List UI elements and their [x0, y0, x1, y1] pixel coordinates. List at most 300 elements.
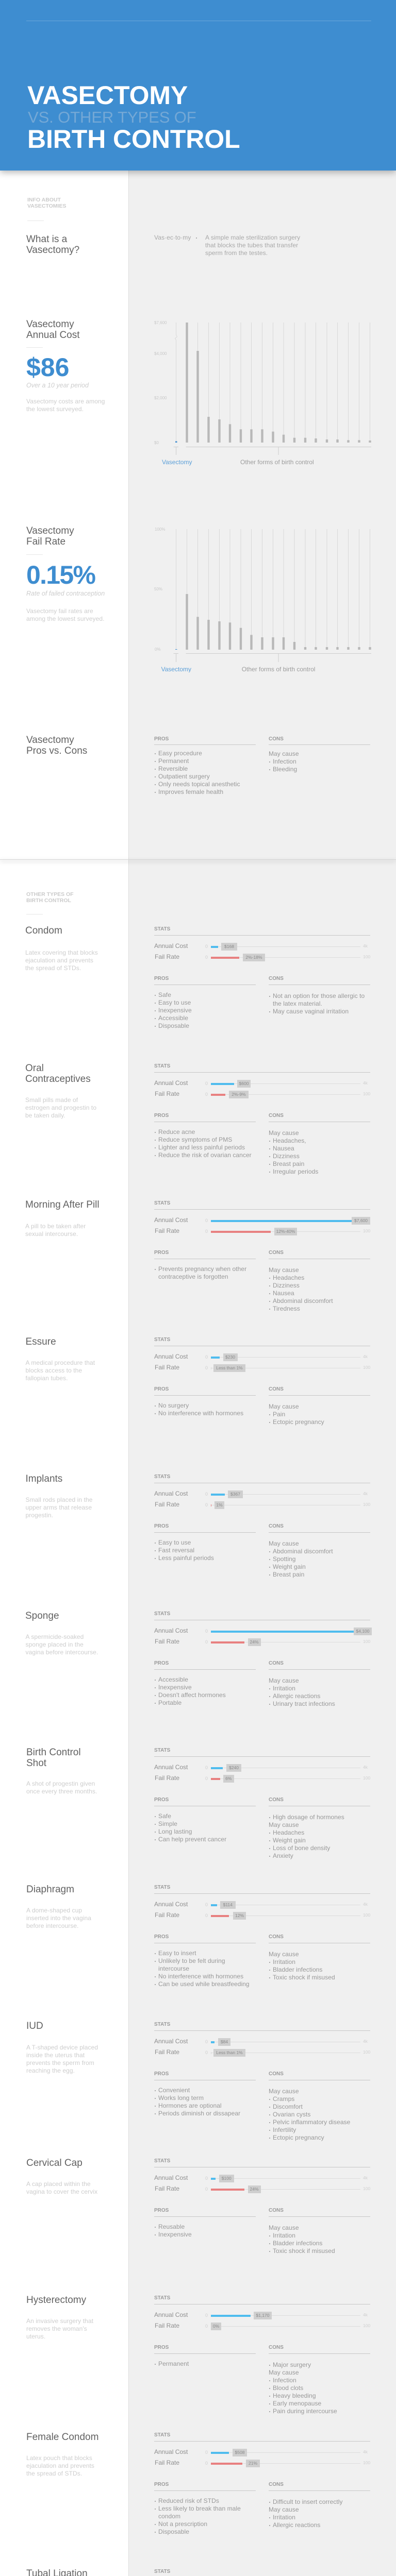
stat row: fail rate: 1% [216, 1502, 223, 1507]
cons: May cause [269, 2088, 299, 2095]
stat row: annual cost: Annual Cost [154, 2038, 188, 2045]
subtitle: vs. other types of: VS. OTHER TYPES OF [28, 108, 196, 126]
stat row: annual cost: 0 [205, 1629, 208, 1634]
stat row: fail rate [154, 1364, 372, 1372]
definition text: that blocks the tubes that transfer [205, 242, 298, 249]
stat row: fail rate: 2%-9% [232, 1092, 246, 1097]
stat row: fail rate: 0 [205, 2050, 208, 2055]
stat row: fail rate: 100 [363, 1502, 370, 1507]
stat row: fail rate: Fail Rate [155, 1364, 179, 1371]
cons: Allergic reactions [273, 1692, 320, 1700]
panel: vasectomy pros [154, 736, 256, 795]
stat row: annual cost: 0 [205, 2313, 208, 2318]
description: ejaculation and prevents [26, 2462, 94, 2469]
stats [154, 1063, 370, 1098]
cons: Tiredness [273, 1305, 300, 1312]
text: cost summary: Vasectomy costs are among [26, 398, 105, 405]
stat row: annual cost [154, 2449, 372, 2456]
cons: May cause [269, 1821, 299, 1828]
cons: Bladder infections [273, 2240, 322, 2247]
stat row: annual cost: 4k [363, 1902, 368, 1907]
cons: CONS [269, 1660, 284, 1666]
panel: vasectomy pros: Easy procedure [158, 750, 202, 757]
section divider shadow [0, 859, 396, 860]
cons: Heavy bleeding [273, 2392, 316, 2399]
description [26, 1907, 91, 1930]
cons: Dizziness [273, 1282, 300, 1289]
stat row: fail rate: 0 [205, 1092, 208, 1097]
stat row: annual cost: Annual Cost [154, 1490, 188, 1497]
cons: May cause vaginal irritation [273, 1008, 349, 1015]
pros: Permanent [158, 2360, 189, 2367]
heading: what is a vasectomy: What is a [26, 234, 67, 245]
pros: Inexpensive [158, 1684, 192, 1691]
description: inserted into the vagina [26, 1914, 91, 1922]
y axis labels: 0% [155, 647, 161, 652]
description: inside the uterus that [26, 2052, 85, 2059]
stat row: fail rate: 100 [363, 1912, 370, 1918]
cons [269, 1934, 370, 2006]
description: removes the woman's [26, 2325, 87, 2332]
cons: Abdominal discomfort [273, 1297, 333, 1304]
stat row: annual cost [154, 1901, 372, 1909]
description: A T-shaped device placed [26, 2044, 98, 2051]
heading: condom: Condom [25, 925, 62, 936]
panel: oral contraceptives [25, 1063, 370, 1175]
big stat: 0.15%: 0.15% [26, 561, 95, 589]
description: progestin. [26, 1512, 53, 1519]
stat row: annual cost [154, 1079, 368, 1088]
cons: Urinary tract infections [273, 1700, 335, 1707]
pros [154, 1797, 256, 1869]
stat row: annual cost [154, 2312, 372, 2319]
pros: PROS [154, 976, 169, 981]
stats [154, 2021, 372, 2058]
panel: vasectomy pros: Only needs topical anesthetic [158, 781, 240, 788]
definition text [205, 234, 300, 257]
pros: condom [158, 2513, 180, 2520]
stat row: annual cost: 0 [205, 2039, 208, 2044]
heading: Essure [26, 1336, 56, 1347]
stat row: fail rate: 0 [205, 2461, 208, 2466]
description: blocks access to the [26, 1367, 82, 1374]
cons [269, 1386, 370, 1458]
cons: Headaches [273, 1829, 304, 1836]
cons: Spotting [273, 1555, 296, 1563]
description [26, 2454, 94, 2478]
cons: Difficult to insert correctly [273, 2498, 343, 2505]
heading: vasectomy annual cost: Vasectomy [26, 319, 74, 330]
pros [154, 2071, 256, 2143]
description [26, 2180, 97, 2196]
stat row: fail rate: Less than 1% [216, 1365, 243, 1370]
cons: Not an option for those allergic to [273, 992, 365, 999]
stat row: annual cost [154, 1628, 372, 1635]
cons: Pelvic inflammatory disease [273, 2119, 350, 2126]
stat row: fail rate: 0 [205, 2324, 208, 2329]
cons [269, 1797, 370, 1869]
cons: Headaches, [273, 1137, 306, 1144]
stat row: fail rate: 0 [205, 1639, 208, 1645]
description: once every three months. [26, 1788, 97, 1795]
panel: hysterectomy [0, 2289, 396, 2420]
description: Small pills made of [25, 1096, 78, 1104]
heading: vasectomy annual cost: Annual Cost [26, 330, 80, 341]
pros: Reduced risk of STDs [158, 2497, 219, 2504]
panel: vasectomy cons: Bleeding [273, 766, 297, 773]
text: fail rate summary: among the lowest surveyed. [26, 615, 104, 622]
heading [26, 1747, 81, 1769]
panel: cervical cap [0, 2151, 396, 2283]
pros: Easy to use [158, 999, 191, 1006]
big stat: $86: $86 [26, 353, 69, 382]
stat row: annual cost: $508 [235, 2450, 244, 2455]
stat row: fail rate [155, 953, 370, 961]
stat row: annual cost: 0 [205, 1902, 208, 1907]
stat row: fail rate: 100 [363, 954, 370, 959]
stat row: fail rate: 100 [363, 1091, 370, 1096]
pros [154, 1660, 256, 1732]
cons: Toxic shock if misused [273, 1974, 335, 1981]
section eyebrow: other types of birth control [26, 891, 74, 904]
pros: Disposable [158, 2528, 189, 2535]
cons: Weight gain [273, 1837, 306, 1844]
pros: Disposable [158, 1022, 189, 1029]
stat row: fail rate: 6% [225, 1776, 232, 1781]
pros [154, 1386, 256, 1458]
cons: Nausea [273, 1145, 294, 1152]
pros: Fast reversal [158, 1547, 194, 1554]
stat row: annual cost [154, 2038, 372, 2046]
stat row: fail rate: 24% [250, 1639, 259, 1645]
pros: No interference with hormones [158, 1410, 243, 1417]
pros: Works long term [158, 2094, 204, 2102]
description [25, 1096, 96, 1119]
stat row: fail rate: 24% [250, 2187, 259, 2192]
description: A shot of progestin given [26, 1780, 95, 1787]
stat row: annual cost: Annual Cost [154, 2448, 188, 2455]
stat row: annual cost: 0 [205, 944, 208, 949]
heading: Shot [26, 1758, 46, 1769]
text: cost summary: the lowest surveyed. [26, 405, 84, 413]
cons: Irritation [273, 2514, 295, 2521]
section eyebrow: info about vasectomies: INFO ABOUT [27, 197, 61, 203]
cons: Nausea [273, 1290, 294, 1297]
cons: Blood clots [273, 2384, 303, 2392]
stat row: fail rate [154, 2185, 372, 2193]
cons: May cause [269, 1129, 299, 1137]
stats: STATS [154, 2022, 170, 2027]
stats [154, 1200, 370, 1235]
cons: Bladder infections [273, 1966, 322, 1973]
stat row: fail rate: Fail Rate [155, 953, 179, 960]
cons: Irritation [273, 1685, 295, 1692]
heading: Implants [26, 1473, 62, 1484]
cons [269, 2207, 370, 2279]
cons: May cause [269, 2506, 299, 2513]
pros [154, 1934, 256, 2006]
cons: May cause [269, 2224, 299, 2231]
description: A dome-shaped cup [26, 1907, 82, 1914]
text: fail rate summary: Vasectomy fail rates are [26, 607, 93, 615]
cons: Early menopause [273, 2400, 321, 2407]
description: the spread of STDs. [25, 964, 81, 972]
cons: Irregular periods [273, 1168, 318, 1175]
cons: May cause [269, 1403, 299, 1410]
description: sexual intercourse. [25, 1230, 78, 1238]
background: column divider [128, 171, 129, 2576]
description: estrogen and progestin to [25, 1104, 96, 1111]
stat row: fail rate: Fail Rate [155, 2185, 179, 2192]
bar chart: fail rate comparison [154, 527, 371, 672]
cons: Anxiety [273, 1852, 293, 1859]
description: Latex covering that blocks [25, 949, 98, 956]
pros [154, 2344, 256, 2416]
pros: Prevents pregnancy when other [158, 1265, 246, 1273]
cons [269, 1250, 370, 1312]
pros [154, 2481, 256, 2553]
stat row: annual cost: 4k [363, 2312, 368, 2317]
cons [269, 2071, 370, 2143]
stat row: annual cost: 4k [363, 2175, 368, 2180]
panel: essure [26, 1336, 370, 1426]
stats [154, 1747, 372, 1784]
panel: condom [25, 925, 370, 1029]
title: vasectomy: VASECTOMY [27, 81, 188, 110]
cons: CONS [269, 1113, 284, 1118]
stats: STATS [154, 1748, 170, 1753]
cons: Ectopic pregnancy [273, 1418, 324, 1426]
bars: other forms of birth control [186, 323, 371, 443]
pros: Can be used while breastfeeding [158, 1980, 250, 1988]
stat row: fail rate: 2%-18% [245, 955, 262, 960]
pros: Inexpensive [158, 2231, 192, 2238]
description [25, 1223, 86, 1238]
pros: Less painful periods [158, 1554, 214, 1562]
stat row: annual cost [154, 2175, 372, 2182]
stat row: fail rate: Fail Rate [155, 2048, 179, 2056]
stat row: fail rate: 100 [363, 2049, 370, 2055]
cons [269, 1523, 370, 1595]
stat row: annual cost [154, 1764, 372, 1772]
stat row: annual cost: 0 [205, 1218, 208, 1223]
stats [154, 2295, 372, 2332]
heading: Contraceptives [25, 1074, 91, 1084]
pros: Accessible [158, 1014, 188, 1022]
stat row: fail rate: 100 [363, 2460, 370, 2465]
panel: tubal ligation [0, 2562, 396, 2576]
stat row: annual cost [154, 1353, 368, 1361]
heading: Hysterectomy [26, 2295, 86, 2306]
stats: STATS [154, 2569, 170, 2574]
description: prevents the sperm from [26, 2059, 94, 2066]
pros: Convenient [158, 2087, 190, 2094]
cons: CONS [269, 1523, 284, 1529]
stats: STATS [154, 1337, 170, 1343]
stat row: annual cost: 4k [363, 2449, 368, 2454]
description: the spread of STDs. [26, 2470, 82, 2477]
description: vagina before intercourse. [26, 1649, 98, 1656]
cons: Headaches [273, 1274, 304, 1281]
cons: Discomfort [273, 2103, 303, 2110]
cons: CONS [269, 976, 284, 981]
description [26, 1780, 97, 1795]
pros: Accessible [158, 1676, 188, 1683]
heading: vasectomy fail rate [26, 526, 74, 547]
pros: PROS [154, 1386, 169, 1392]
stat row: fail rate [154, 2323, 372, 2330]
stat row: fail rate [154, 1775, 372, 1783]
heading: Morning After Pill [25, 1199, 100, 1210]
stat row: annual cost [154, 1216, 370, 1225]
pros: Safe [158, 991, 171, 998]
cons [269, 2344, 370, 2416]
cons: Dizziness [273, 1153, 300, 1160]
stats [154, 1611, 372, 1648]
stats [154, 1473, 372, 1511]
header banner [0, 0, 396, 171]
stat row: annual cost: 4k [363, 943, 368, 948]
cons: May cause [269, 1951, 299, 1958]
cons: CONS [269, 2208, 284, 2213]
pros: PROS [154, 1523, 169, 1529]
stats: STATS [154, 1611, 170, 1617]
stats: STATS [154, 2295, 170, 2301]
pros: PROS [154, 1660, 169, 1666]
stat row: annual cost: Annual Cost [154, 942, 188, 950]
pros: Easy to insert [158, 1950, 196, 1957]
stats: STATS [154, 1200, 170, 1206]
axis label: other forms: Other forms of birth control [240, 459, 314, 466]
description [26, 1496, 93, 1519]
heading: Cervical Cap [26, 2158, 82, 2168]
stat row: annual cost: 4k [363, 2039, 368, 2044]
description [26, 1633, 98, 1656]
cons: May cause [269, 2369, 299, 2376]
stat row: annual cost: $4,100 [356, 1629, 369, 1634]
bars: other forms of birth control [186, 594, 371, 650]
pros [154, 1113, 256, 1159]
heading: IUD [26, 2021, 43, 2031]
panel: vasectomy cons: Infection [273, 758, 296, 765]
description: uterus. [26, 2333, 45, 2340]
stats: STATS [154, 2158, 170, 2164]
pros: No interference with hormones [158, 1973, 243, 1980]
stat row: fail rate: 100 [363, 1775, 370, 1781]
stat row: fail rate: 0 [205, 2187, 208, 2192]
pros: Periods diminish or dissapear [158, 2110, 240, 2117]
description: sponge placed in the [26, 1641, 84, 1648]
cons: Breast pain [273, 1571, 304, 1578]
heading: what is a vasectomy: Vasectomy? [26, 245, 79, 256]
pros: Lighter and less painful periods [158, 1144, 245, 1151]
stat row: annual cost: $100 [222, 2176, 232, 2181]
cons: CONS [269, 1797, 284, 1803]
description: ejaculation and prevents [25, 957, 93, 964]
description: vagina to cover the cervix [26, 2188, 97, 2195]
y axis labels: $7,600 [154, 320, 167, 325]
y axis labels [154, 527, 165, 652]
text: fail rate summary [26, 607, 104, 622]
panel: vasectomy pros: Outpatient surgery [158, 773, 210, 780]
cons: CONS [269, 2345, 284, 2350]
stat row: annual cost: Annual Cost [154, 1764, 188, 1771]
heading: Female Condom [26, 2432, 98, 2443]
section eyebrow: other types of birth control: OTHER TYPES OF [26, 891, 74, 897]
description: upper arms that release [26, 1504, 92, 1511]
y axis labels: $4,000 [154, 351, 167, 356]
stat row: annual cost: Annual Cost [154, 2174, 188, 2181]
cons: Pain during intercourse [273, 2408, 337, 2415]
stat row: annual cost: $168 [224, 944, 234, 949]
stat row: annual cost: Annual Cost [154, 1627, 188, 1634]
heading: Sponge [25, 1611, 59, 1621]
cons: Cramps [273, 2095, 294, 2103]
stat row: annual cost: 0 [205, 2176, 208, 2181]
stat row: annual cost: $367 [230, 1492, 240, 1497]
title: birth control: BIRTH CONTROL [27, 125, 240, 154]
description: Latex pouch that blocks [26, 2454, 92, 2462]
axis label: vasectomy: Vasectomy [162, 459, 192, 466]
description [26, 2044, 98, 2075]
description [26, 1359, 95, 1382]
definition separator [196, 238, 197, 239]
stat row: annual cost: Annual Cost [154, 1353, 188, 1360]
stats [154, 2158, 372, 2195]
stat row: fail rate [155, 1090, 370, 1098]
stats [154, 1884, 372, 1921]
pros: intercourse [158, 1965, 189, 1972]
heading: vasectomy annual cost [26, 319, 80, 341]
stat row: annual cost: Annual Cost [154, 1079, 188, 1087]
heading: vasectomy fail rate: Vasectomy [26, 526, 74, 536]
panel: morning after pill [25, 1199, 370, 1312]
cons [269, 1660, 370, 1732]
description [25, 949, 98, 972]
bar: vasectomy [175, 441, 177, 443]
stat row: fail rate [154, 2049, 372, 2057]
panel: vasectomy cons: CONS [269, 736, 284, 742]
description: fallopian tubes. [26, 1375, 68, 1382]
description: Small rods placed in the [26, 1496, 93, 1503]
stat row: fail rate [155, 1227, 370, 1235]
description: A cap placed within the [26, 2180, 91, 2188]
cons: Toxic shock if misused [273, 2247, 335, 2255]
section eyebrow: info about vasectomies: VASECTOMIES [27, 203, 66, 209]
heading: vasectomy pros vs. cons [26, 735, 87, 756]
pros: PROS [154, 1797, 169, 1803]
panel: diaphragm [0, 1878, 396, 2009]
pros: PROS [154, 1250, 169, 1256]
stat row: annual cost: 4k [363, 1354, 368, 1359]
cons: Breast pain [273, 1160, 304, 1167]
pros: PROS [154, 2071, 169, 2077]
description: reaching the egg. [26, 2067, 75, 2074]
stat row: annual cost: 4k [363, 1491, 368, 1496]
cons: Ovarian cysts [273, 2111, 310, 2118]
pros: Reusable [158, 2223, 185, 2230]
stat row: annual cost: 0 [205, 1492, 208, 1497]
cons: Allergic reactions [273, 2521, 320, 2529]
cons: Major surgery [273, 2361, 311, 2368]
cons [269, 1113, 370, 1175]
pros: Unlikely to be felt during [158, 1957, 225, 1964]
pros: Inexpensive [158, 1007, 192, 1014]
stat row: annual cost: 0 [205, 1081, 208, 1086]
stat row: fail rate: 0 [205, 1913, 208, 1918]
stat row: fail rate: Fail Rate [155, 1911, 179, 1919]
definition text: A simple male sterilization surgery [205, 234, 300, 241]
